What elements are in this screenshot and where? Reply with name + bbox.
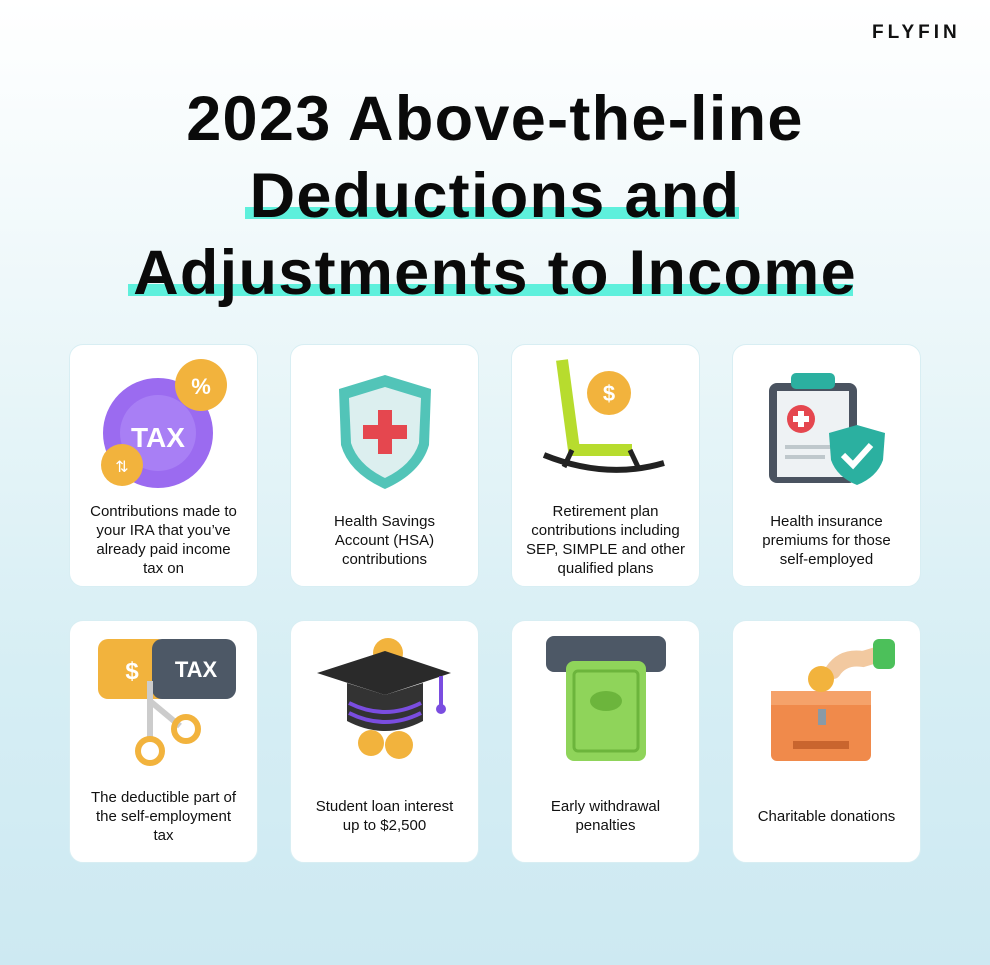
icon: donation box bbox=[771, 639, 895, 761]
icon: shield bbox=[339, 375, 431, 489]
text: Health Savings Account (HSA) contributions bbox=[334, 512, 435, 568]
icon: tax ticket scissors bbox=[98, 639, 236, 766]
title: Adjustments to Income bbox=[133, 238, 857, 308]
title: Deductions and bbox=[250, 161, 740, 231]
card: HSA bbox=[290, 344, 479, 587]
title: 2023 Above-the-line bbox=[186, 84, 804, 154]
card: retirement bbox=[511, 344, 700, 587]
text: Contributions made to your IRA that you’ve already paid income tax on bbox=[90, 503, 237, 577]
card: early withdrawal bbox=[511, 620, 700, 863]
logo: FLYFIN bbox=[872, 22, 961, 43]
icon: clipboard bbox=[769, 373, 885, 485]
title bbox=[133, 84, 857, 308]
card: student loan bbox=[290, 620, 479, 863]
icon: tax ticket scissors: $ bbox=[125, 658, 139, 685]
text: Student loan interest up to $2,500 bbox=[316, 798, 453, 834]
text: Early withdrawal penalties bbox=[551, 798, 660, 834]
icon: tax coin: % bbox=[191, 374, 211, 399]
icon: grad cap bbox=[317, 638, 451, 759]
icon: tax coin: ⇅ bbox=[115, 459, 129, 476]
card: self-employment tax bbox=[69, 620, 258, 863]
card: charitable bbox=[732, 620, 921, 863]
card: health insurance bbox=[732, 344, 921, 587]
icon: rocking chair: $ bbox=[603, 381, 615, 406]
text: Charitable donations bbox=[758, 808, 895, 824]
highlight line 2 bbox=[245, 207, 739, 219]
icon: rocking chair bbox=[542, 359, 665, 473]
text: Retirement plan contributions including SEP, SIMPLE and other qualified plans bbox=[526, 503, 685, 577]
icon: tax ticket scissors: TAX bbox=[175, 657, 218, 682]
card: IRA bbox=[69, 344, 258, 587]
highlight line 3 bbox=[128, 284, 853, 296]
icon: atm bill bbox=[546, 636, 666, 761]
text: Health insurance premiums for those self-employed bbox=[762, 512, 891, 568]
text: The deductible part of the self-employment tax bbox=[91, 788, 236, 844]
icon: tax coin bbox=[101, 359, 227, 488]
icon: tax coin: TAX bbox=[131, 422, 185, 453]
